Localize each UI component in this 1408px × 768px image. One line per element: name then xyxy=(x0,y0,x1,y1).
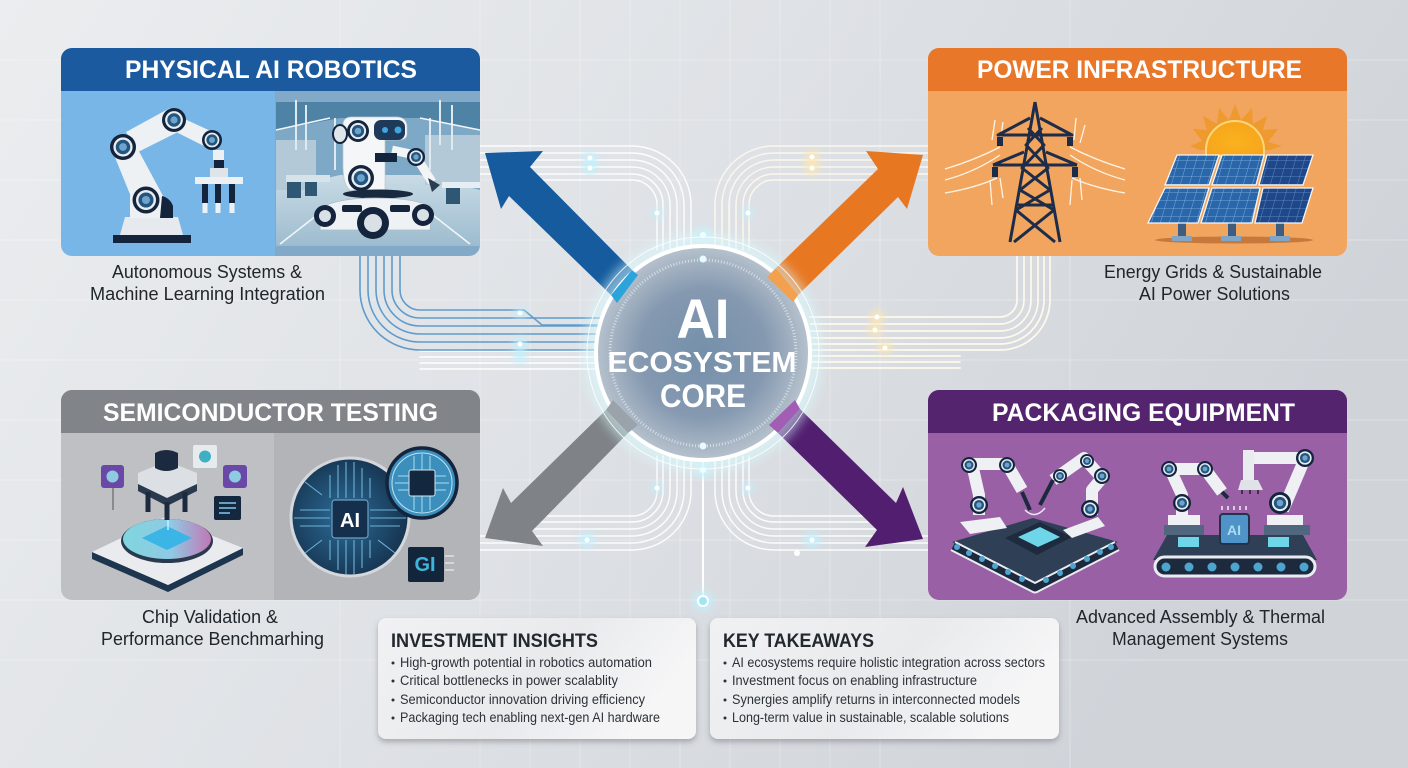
insights list: High-growth potential in robotics automation xyxy=(400,655,652,670)
panel: Semiconductor Testing xyxy=(61,390,480,600)
panel: Power Infrastructure xyxy=(928,48,1347,256)
takeaways list: Investment focus on enabling infrastructure xyxy=(732,673,977,688)
heading: POWER INFRASTRUCTURE xyxy=(977,56,1302,84)
heading: PHYSICAL AI ROBOTICS xyxy=(125,56,417,84)
caption: robotics: Autonomous Systems & xyxy=(112,261,303,282)
chip label: AI xyxy=(1227,522,1241,538)
caption: power: AI Power Solutions xyxy=(1139,283,1290,304)
arrow base: gray xyxy=(606,400,638,433)
caption: power xyxy=(1104,261,1322,304)
heading: INVESTMENT INSIGHTS xyxy=(391,631,598,652)
arrow: blue to Physical AI Robotics xyxy=(485,151,632,295)
panel: Packaging Equipment xyxy=(928,390,1347,600)
icon: solar panels xyxy=(1148,155,1313,244)
icon: robot arm xyxy=(110,108,243,243)
caption: robotics xyxy=(90,261,325,304)
core title xyxy=(608,287,796,414)
heading: SEMICONDUCTOR TESTING xyxy=(103,399,438,427)
arrow: gray to Semiconductor Testing xyxy=(485,410,628,546)
icon: wafer probe station xyxy=(92,445,247,592)
takeaways list xyxy=(724,655,1045,725)
icon: AI chip disc xyxy=(291,448,457,582)
caption: semiconductor: Chip Validation & xyxy=(142,606,279,627)
takeaways list: Long-term value in sustainable, scalable solutions xyxy=(732,710,1009,725)
icon: mobile robot xyxy=(314,117,440,239)
takeaways list: AI ecosystems require holistic integration across sectors xyxy=(732,655,1045,670)
takeaways list: Synergies amplify returns in interconnected models xyxy=(732,692,1020,707)
chip label: AI xyxy=(340,510,360,532)
panel: Physical AI Robotics xyxy=(61,48,480,256)
heading: PACKAGING EQUIPMENT xyxy=(992,399,1295,427)
caption: power: Energy Grids & Sustainable xyxy=(1104,261,1322,282)
caption: packaging: Advanced Assembly & Thermal xyxy=(1076,606,1325,627)
arrow base: purple xyxy=(769,400,800,433)
core hub xyxy=(583,233,823,473)
heading: KEY TAKEAWAYS xyxy=(723,631,874,652)
caption: packaging xyxy=(1076,606,1325,649)
icon: flat conveyor with arms xyxy=(1153,449,1317,576)
caption: packaging: Management Systems xyxy=(1112,628,1288,649)
arrow: purple to Packaging Equipment xyxy=(778,409,923,547)
caption: semiconductor: Performance Benchmarhing xyxy=(101,628,324,649)
arrow base: orange xyxy=(767,268,798,302)
core title: ECOSYSTEM xyxy=(608,347,796,379)
icon: transmission tower xyxy=(945,102,1125,242)
glowing nodes xyxy=(514,151,891,610)
panel: Investment Insights xyxy=(378,618,696,739)
insights list: Packaging tech enabling next-gen AI hardware xyxy=(400,710,660,725)
insights list: Critical bottlenecks in power scalablity xyxy=(400,673,618,688)
caption: robotics: Machine Learning Integration xyxy=(90,283,325,304)
icon: isometric conveyor with arms xyxy=(952,454,1118,588)
arrow: orange to Power Infrastructure xyxy=(776,151,923,295)
core title: CORE xyxy=(660,378,746,414)
insights list xyxy=(392,655,660,725)
insights list: Semiconductor innovation driving efficiency xyxy=(400,692,645,707)
icon: sun xyxy=(1190,104,1282,156)
core title: AI xyxy=(676,287,730,350)
caption: semiconductor xyxy=(101,606,324,649)
arrow base: blue xyxy=(611,270,638,303)
circuit traces xyxy=(360,146,1050,600)
panel: Key Takeaways xyxy=(710,618,1059,739)
chip tag: GI xyxy=(414,554,436,576)
